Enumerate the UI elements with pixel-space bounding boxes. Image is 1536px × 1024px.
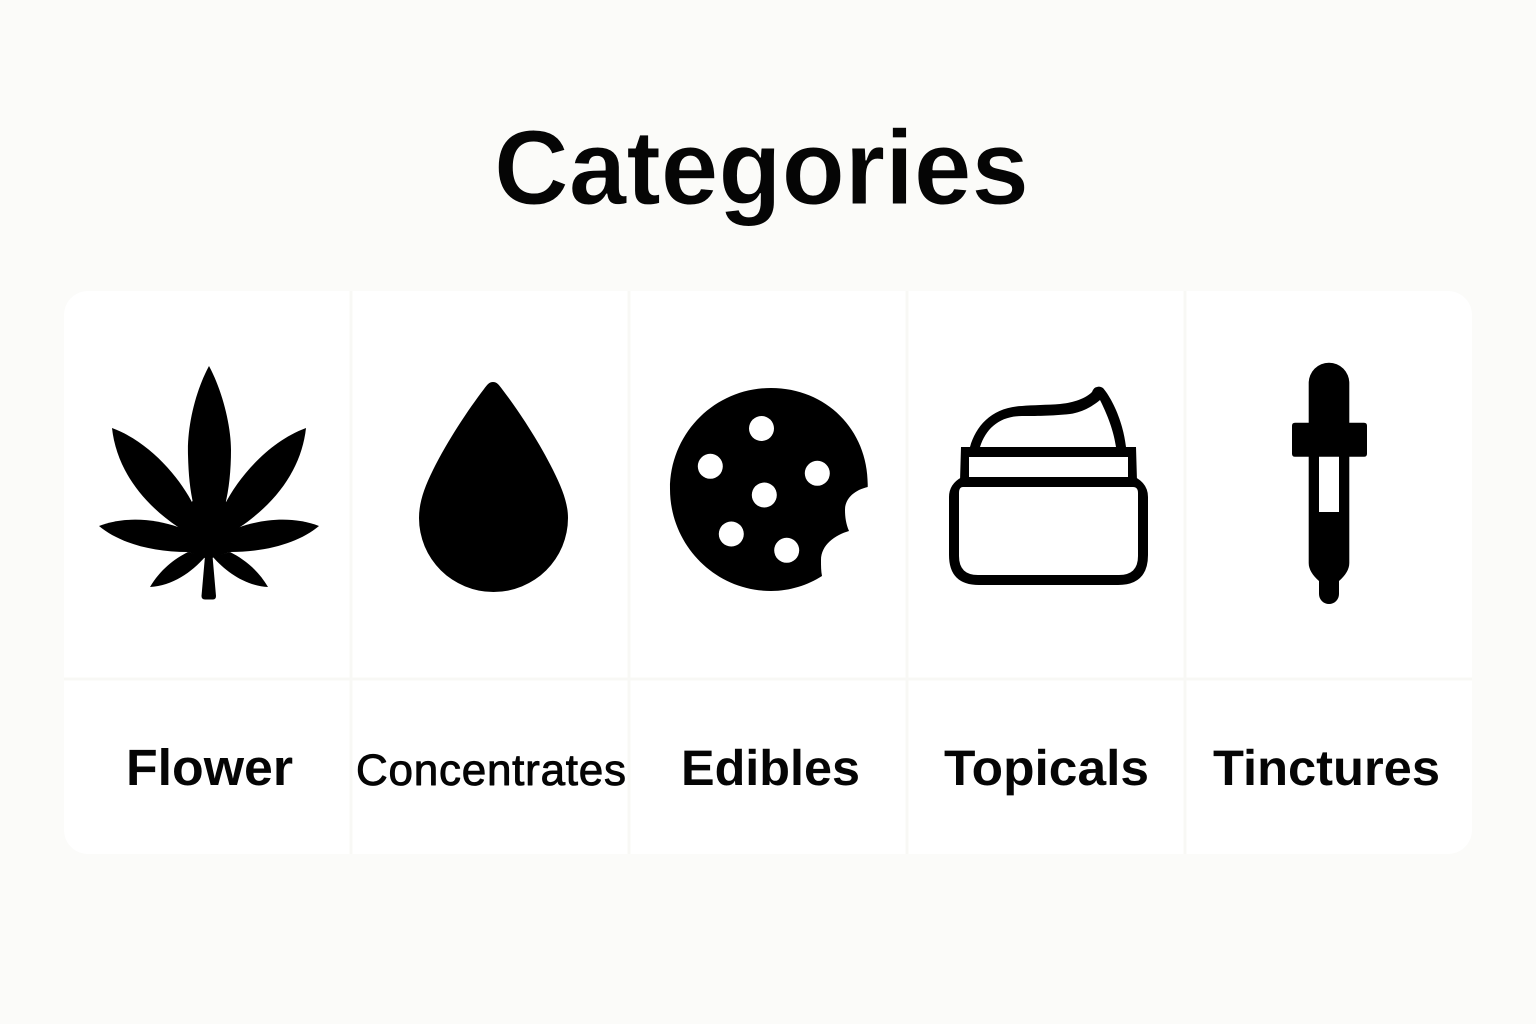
icon: droplet (Concentrates) <box>419 382 568 592</box>
panel: category grid <box>64 291 1472 854</box>
label: Flower: Flower <box>126 739 293 796</box>
label: Concentrates: Concentrates <box>356 746 626 795</box>
label: Tinctures: Tinctures <box>1213 740 1440 796</box>
icon: cookie (Edibles) <box>670 388 868 591</box>
icon: cannabis leaf (Flower) <box>99 366 319 600</box>
title: Categories <box>494 109 1029 227</box>
icon: cream jar (Topicals) <box>949 387 1148 585</box>
label: Edibles: Edibles <box>681 740 860 796</box>
label: Topicals: Topicals <box>944 740 1149 796</box>
icon: dropper (Tinctures) <box>1292 363 1367 604</box>
